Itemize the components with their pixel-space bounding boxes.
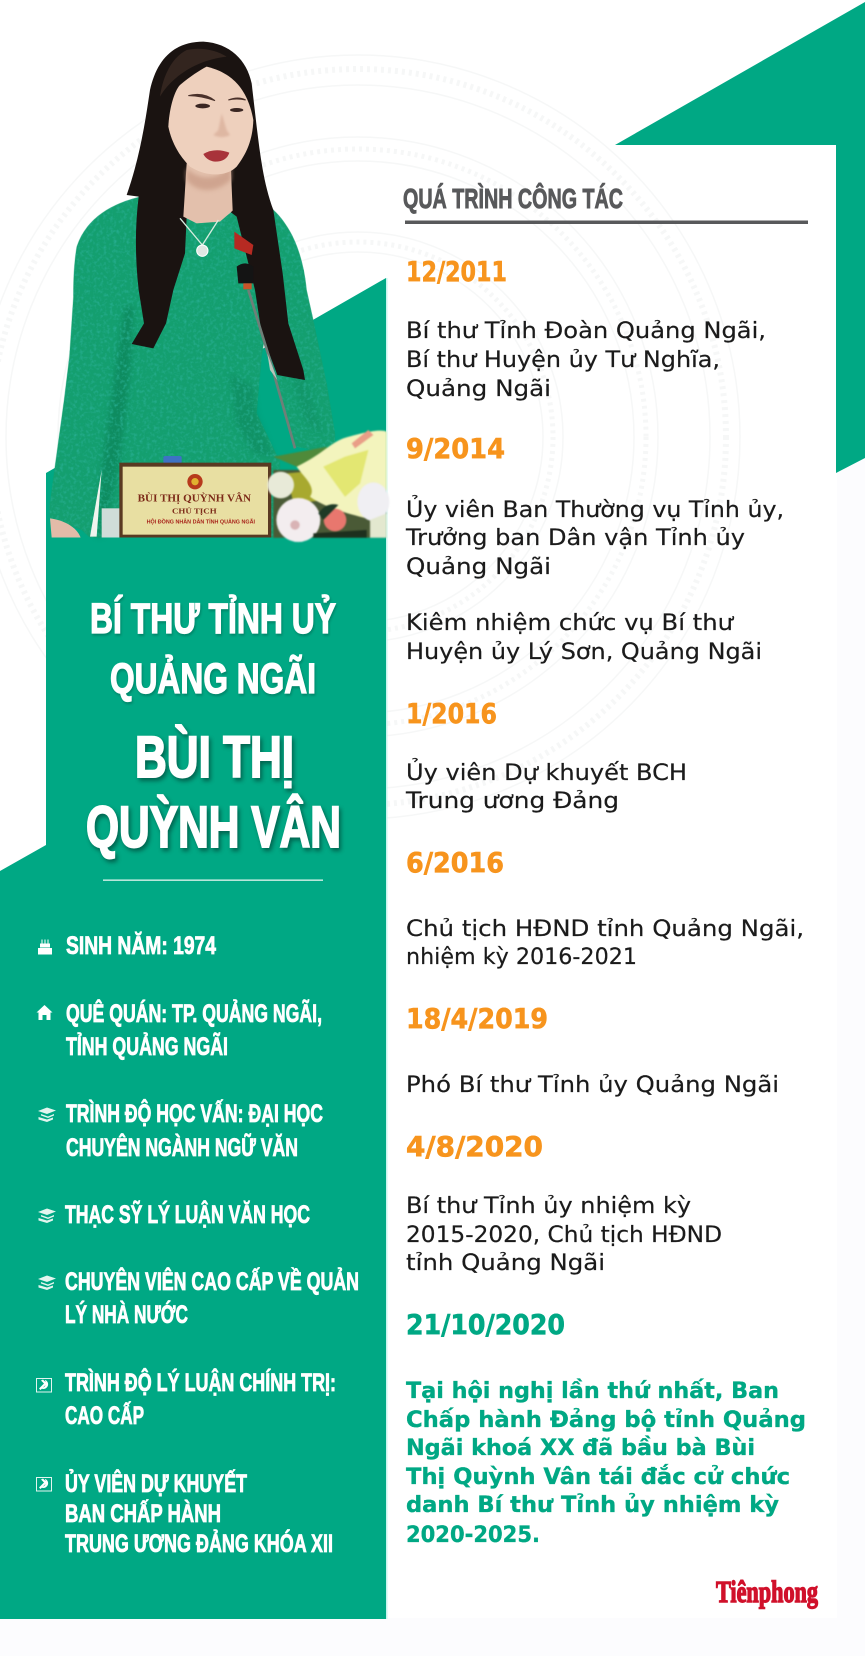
timeline: 4/8/2020: 4/8/2020: [406, 1131, 543, 1163]
timeline: 18/4/2019: Phó Bí thư Tỉnh ủy Quảng Ngãi: [406, 1072, 779, 1098]
white sliver between arm and body: [90, 470, 102, 537]
timeline: 9/2014: Huyện ủy Lý Sơn, Quảng Ngãi: [406, 639, 762, 665]
timeline: 9/2014: Ủy viên Ban Thường vụ Tỉnh ủy,: [406, 494, 784, 523]
neck: [183, 163, 233, 223]
education: TRÌNH ĐỘ HỌC VẤN: ĐẠI HỌC: [66, 1098, 323, 1128]
alternate member: [36, 1468, 333, 1558]
senior specialist: LÝ NHÀ NƯỚC: [65, 1299, 188, 1329]
name plate: BÙI THỊ QUỲNH VÂN: [138, 493, 252, 505]
senior specialist: [38, 1266, 359, 1329]
timeline: 21/10/2020 highlight: Ngãi khoá XX đã bầu bà Bùi: [406, 1434, 755, 1461]
title: position: QUẢNG NGÃI: [110, 654, 316, 703]
education: [38, 1098, 323, 1162]
timeline: 6/2016: [406, 847, 804, 970]
political theory level: [36, 1367, 336, 1430]
water glass and bottle cap: [102, 456, 182, 538]
timeline: 1/2016: [405, 698, 687, 814]
timeline: 21/10/2020 highlight: Chấp hành Đảng bộ tỉnh Quảng: [406, 1406, 806, 1433]
timeline: 21/10/2020 highlight: Tại hội nghị lần thứ nhất, Ban: [406, 1377, 779, 1404]
hometown: [36, 998, 322, 1061]
timeline: 9/2014: [405, 433, 784, 665]
timeline: 1/2016: Trung ương Đảng: [405, 788, 619, 814]
political theory level: TRÌNH ĐỘ LÝ LUẬN CHÍNH TRỊ:: [65, 1367, 336, 1397]
timeline: 12/2011: Bí thư Tỉnh Đoàn Quảng Ngãi,: [406, 318, 766, 344]
master's degree: [38, 1199, 310, 1229]
timeline: 21/10/2020 highlight: 21/10/2020: [406, 1309, 565, 1341]
timeline: 21/10/2020 highlight: danh Bí thư Tỉnh ủy nhiệm kỳ: [406, 1492, 779, 1518]
timeline: 1/2016: 1/2016: [406, 698, 497, 730]
timeline: 4/8/2020: 2015-2020, Chủ tịch HĐND: [406, 1222, 722, 1248]
microphone: [237, 263, 295, 448]
timeline: 6/2016: 6/2016: [406, 847, 504, 879]
political theory level: CAO CẤP: [65, 1401, 144, 1430]
timeline: 18/4/2019: [406, 1003, 779, 1098]
birth year: SINH NĂM: 1974: [66, 931, 216, 960]
timeline: 18/4/2019: 18/4/2019: [406, 1003, 548, 1035]
title: name: QUỲNH VÂN: [86, 795, 341, 860]
title: name: BÙI THỊ: [135, 725, 294, 790]
alternate member: TRUNG ƯƠNG ĐẢNG KHÓA XII: [65, 1528, 333, 1558]
hair: [127, 42, 305, 380]
education: CHUYÊN NGÀNH NGỮ VĂN: [66, 1132, 298, 1162]
timeline: 9/2014: Kiêm nhiệm chức vụ Bí thư: [406, 610, 735, 636]
timeline: 21/10/2020 highlight: 2020-2025.: [406, 1522, 540, 1548]
title: name: [86, 725, 341, 860]
title: position: BÍ THƯ TỈNH UỶ: [90, 594, 336, 643]
timeline: 6/2016: Chủ tịch HĐND tỉnh Quảng Ngãi,: [406, 916, 804, 942]
timeline: 4/8/2020: tỉnh Quảng Ngãi: [406, 1250, 605, 1276]
lapel pin: [234, 232, 253, 255]
name plate: HỘI ĐỒNG NHÂN DÂN TỈNH QUẢNG NGÃI: [147, 518, 255, 526]
timeline: 4/8/2020: Bí thư Tỉnh ủy nhiệm kỳ: [406, 1193, 691, 1219]
timeline: 9/2014: 9/2014: [406, 433, 505, 465]
name plate: [119, 463, 271, 538]
timeline: 9/2014: Quảng Ngãi: [406, 554, 551, 580]
heading: work history: QUÁ TRÌNH CÔNG TÁC: [403, 182, 623, 214]
face: [168, 67, 253, 174]
alternate member: BAN CHẤP HÀNH: [65, 1499, 221, 1528]
logo: Tiền Phong: Tiênphong: [716, 1574, 818, 1609]
flowers: [267, 430, 389, 542]
birth year: [38, 931, 216, 960]
top-right green arrow shape: [615, 2, 865, 473]
timeline: 12/2011: Quảng Ngãi: [406, 376, 551, 402]
portrait photo: [49, 42, 389, 542]
timeline: 21/10/2020 highlight: Thị Quỳnh Vân tái đắc cử chức: [406, 1463, 790, 1490]
necklace: [180, 218, 218, 245]
name plate: CHỦ TỊCH: [172, 506, 217, 516]
timeline: 6/2016: nhiệm kỳ 2016-2021: [406, 944, 637, 970]
timeline: 12/2011: [406, 256, 766, 402]
hometown: TỈNH QUẢNG NGÃI: [66, 1031, 228, 1061]
master's degree: THẠC SỸ LÝ LUẬN VĂN HỌC: [65, 1199, 310, 1229]
timeline: 12/2011: Bí thư Huyện ủy Tư Nghĩa,: [406, 347, 720, 373]
alternate member: ỦY VIÊN DỰ KHUYẾT: [65, 1468, 247, 1498]
title: position: [90, 594, 336, 703]
left green panel: [0, 278, 386, 1619]
left hand: [50, 518, 81, 538]
personal details list: [36, 931, 359, 1558]
dress: [49, 197, 335, 538]
timeline: 4/8/2020: [406, 1131, 722, 1276]
hometown: QUÊ QUÁN: TP. QUẢNG NGÃI,: [66, 998, 322, 1028]
timeline: 1/2016: Ủy viên Dự khuyết BCH: [406, 757, 687, 786]
senior specialist: CHUYÊN VIÊN CAO CẤP VỀ QUẢN: [65, 1266, 359, 1296]
timeline: 9/2014: Trưởng ban Dân vận Tỉnh ủy: [405, 525, 745, 551]
timeline: 21/10/2020 highlight: [406, 1309, 806, 1548]
timeline: 12/2011: 12/2011: [406, 256, 507, 288]
